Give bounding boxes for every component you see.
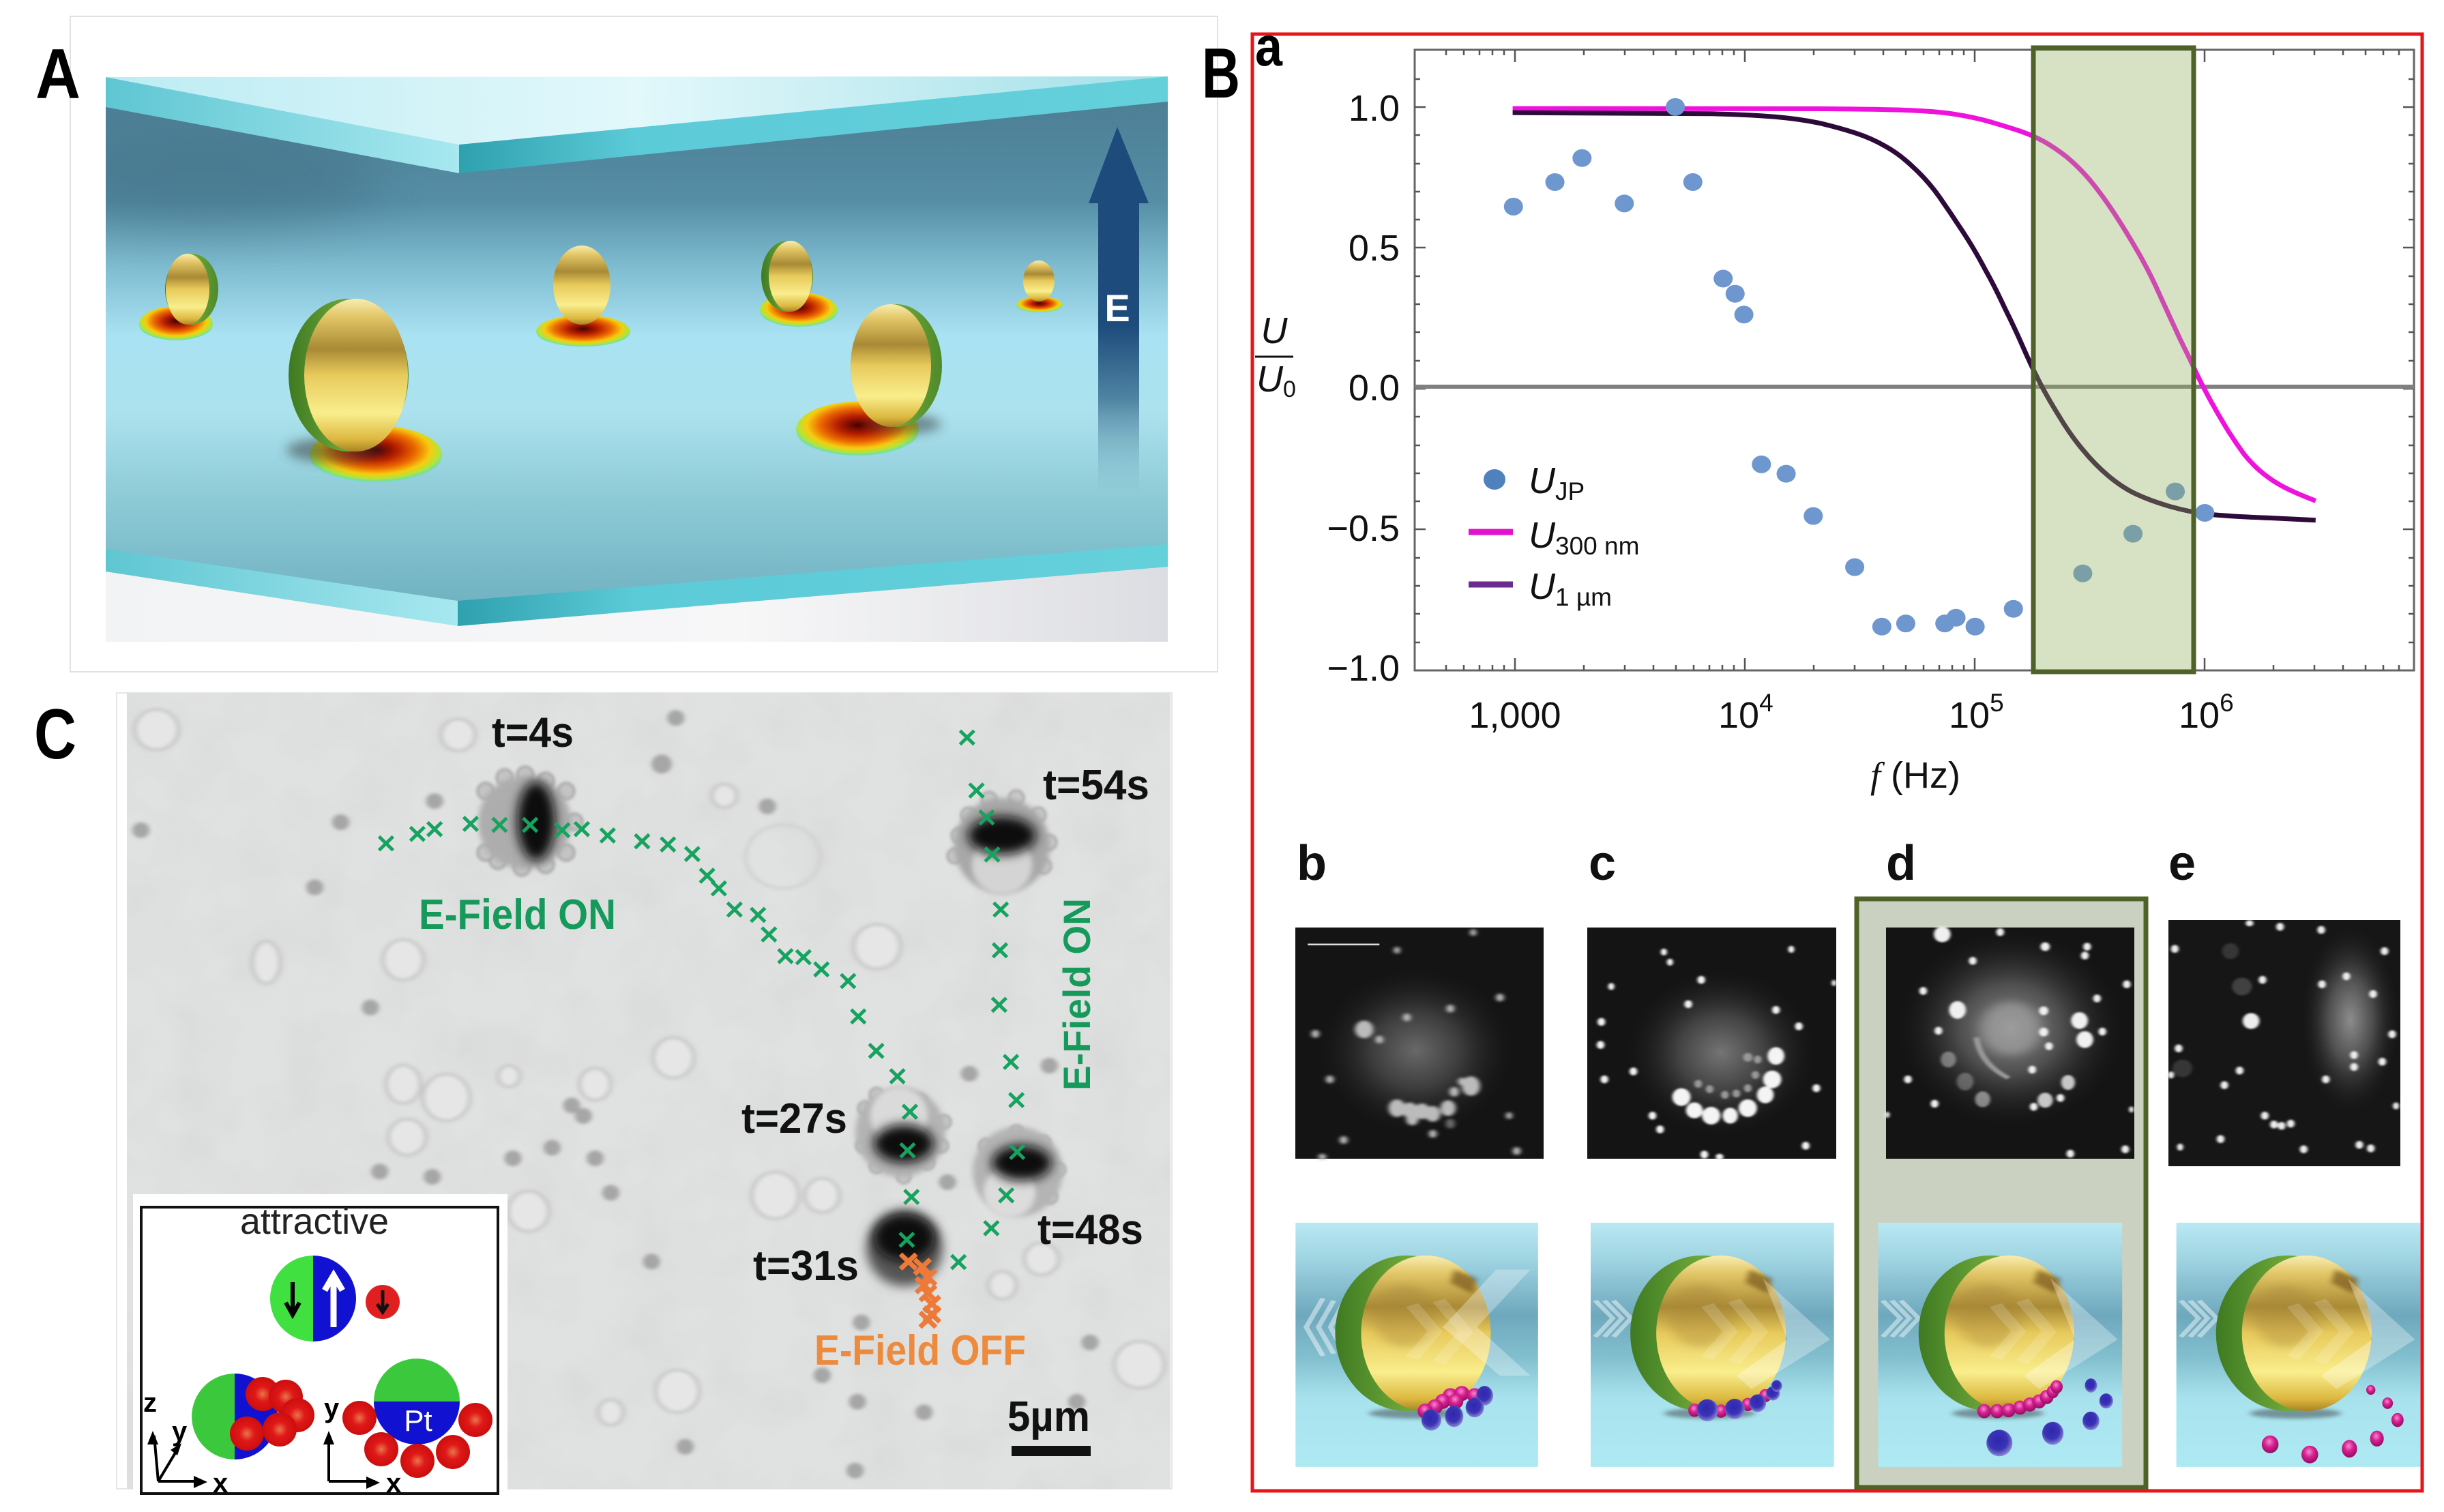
labels b c d e: c: [1589, 836, 1616, 891]
particle at t=31s: [866, 1210, 943, 1286]
particle at t=27s: [855, 1087, 951, 1183]
x axis tick labels: 1,000: [1469, 695, 1561, 736]
bottom plate: [106, 544, 1168, 626]
axes right: y: [324, 1393, 340, 1423]
labels b c d e: d: [1886, 836, 1916, 891]
inset title: attractive: [240, 1201, 389, 1242]
time labels: t=4s: [492, 709, 574, 756]
x axis tick labels: 4: [1759, 689, 1773, 717]
schematic d: Janus particle with pink bead chain: [1878, 1223, 2122, 1467]
axes left: z: [143, 1388, 157, 1418]
y axis title: U: [1256, 359, 1283, 400]
legend: JP: [1555, 477, 1585, 505]
dark curve U1um: [1513, 113, 2316, 520]
field label E: E: [1104, 286, 1130, 329]
large particle left: [286, 299, 442, 484]
legend: U: [1529, 460, 1555, 501]
data points UJP: [1504, 98, 2214, 636]
highlighted frequency band: [2033, 48, 2194, 672]
small particle 1: [139, 254, 218, 342]
y axis tick labels: 0.5: [1349, 228, 1400, 269]
magenta curve U300nm: [1513, 108, 2316, 501]
small particle 4: [1016, 261, 1063, 313]
panel label C: C: [34, 695, 76, 774]
x axis tick labels: 10: [1949, 695, 1990, 736]
inset: attractive interaction schematic: [133, 1194, 507, 1512]
x axis title: f (Hz): [1870, 755, 1960, 796]
axes left: x: [213, 1468, 228, 1498]
x axis tick labels: 5: [1990, 689, 2004, 717]
y axis tick labels: 1.0: [1349, 88, 1400, 129]
panel C: micrograph with particle trajectory: [117, 693, 1172, 1489]
schematic e: Janus particle with dispersed pink beads: [2177, 1223, 2420, 1467]
legend: U: [1529, 566, 1555, 607]
arrow: electric field: [1089, 127, 1149, 491]
particle at t=54s: [947, 790, 1057, 895]
E-Field ON vertical label: E-Field ON: [1055, 898, 1098, 1091]
y axis tick labels: [1327, 88, 1400, 689]
E-Field ON horizontal label: E-Field ON: [419, 891, 616, 938]
time labels: t=54s: [1043, 762, 1149, 809]
time labels: t=27s: [741, 1095, 847, 1142]
background rings: [134, 709, 1164, 1425]
time labels: t=48s: [1037, 1206, 1143, 1254]
labels b c d e: [1297, 836, 2196, 891]
micrograph c: [1587, 928, 1836, 1160]
schematic c: Janus particle with bead ring: [1591, 1223, 1834, 1467]
E-Field OFF label: E-Field OFF: [814, 1327, 1026, 1374]
chart: potential vs frequency: [1255, 48, 2414, 796]
y axis title: U: [1261, 310, 1288, 351]
legend: 1 µm: [1555, 583, 1612, 611]
large particle right: [796, 304, 942, 458]
labels b c d e: e: [2168, 836, 2196, 891]
green trajectory crosses: [379, 730, 1025, 1269]
axes right: [323, 1393, 401, 1498]
panel A: electric cell with Janus particles: [27, 16, 1218, 672]
axes left: [143, 1388, 228, 1498]
scale bar: 5µm: [1007, 1393, 1090, 1440]
panel label B: B: [1202, 34, 1240, 113]
small red particle with arrow: [366, 1285, 400, 1319]
orange trajectory crosses: [900, 1254, 940, 1327]
y axis title: 0: [1283, 376, 1296, 402]
Janus sphere with dipole arrows: [270, 1256, 356, 1341]
labels b c d e: b: [1297, 836, 1327, 891]
top plate: [106, 76, 1168, 173]
micrograph e: [2168, 920, 2400, 1166]
micrograph d: [1885, 926, 2134, 1159]
particle at t=48s: [973, 1125, 1065, 1218]
x axis tick labels: [1469, 689, 2234, 736]
assembled side view: [192, 1374, 314, 1459]
time labels: t=31s: [753, 1243, 859, 1290]
legend: 300 nm: [1555, 532, 1639, 560]
small particle 3: [760, 241, 838, 328]
zero line: [1415, 385, 2414, 389]
axes right: x: [386, 1468, 401, 1498]
assembled top view: [342, 1359, 492, 1478]
y axis tick labels: −1.0: [1327, 648, 1400, 689]
background dark specks: [132, 710, 1099, 1479]
panel B: red frame: [1252, 34, 2422, 1491]
label a: a: [1255, 16, 1283, 78]
panel label A: A: [35, 35, 80, 114]
y axis title: [1255, 310, 1296, 402]
axes left: y: [172, 1417, 188, 1447]
y axis tick labels: −0.5: [1327, 508, 1400, 549]
time labels: [492, 709, 1149, 1290]
highlight column d: [1857, 899, 2146, 1487]
micrograph b: [1295, 928, 1544, 1160]
particle at t=4s: [477, 767, 583, 876]
assembled top view: Pt: [404, 1404, 432, 1438]
legend: U: [1529, 515, 1555, 556]
x axis tick labels: 10: [2179, 695, 2220, 736]
x axis tick labels: 6: [2220, 689, 2234, 717]
y axis tick labels: 0.0: [1349, 368, 1400, 409]
schematic b: Janus particle with mixed beads: [1295, 1223, 1538, 1467]
legend: [1469, 460, 1639, 611]
small particle 2: [536, 246, 630, 348]
x axis tick labels: 10: [1718, 695, 1759, 736]
